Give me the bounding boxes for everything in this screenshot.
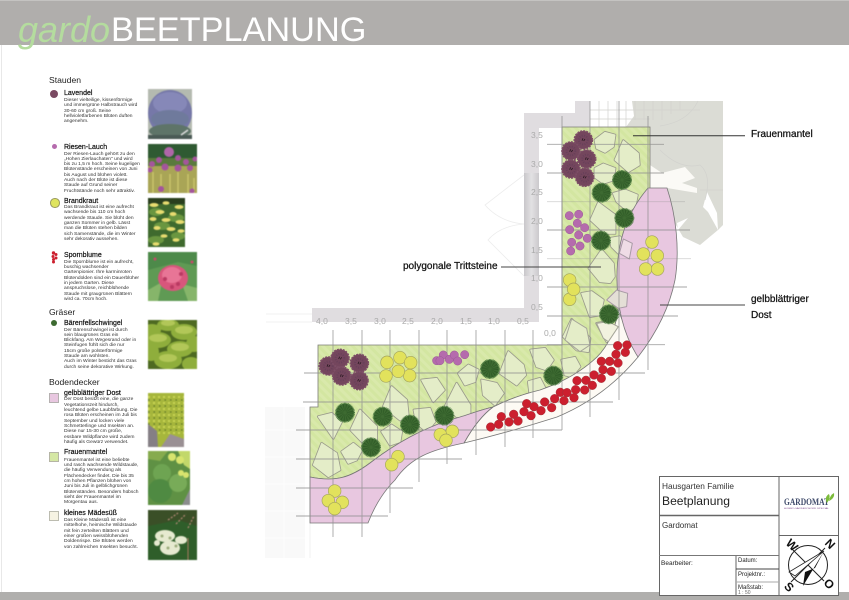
text: Spornblume: Blütendolden sind ein Dauerblüher [64, 276, 139, 281]
logo: Gardomat: GARDOMAT [784, 497, 829, 507]
logo: Gardomat [784, 493, 834, 510]
text: kleines Mädesüß: von zahlreichen Insekten besucht. [64, 545, 138, 550]
text: Spornblume: in jedem Garten. Diese [64, 281, 114, 286]
scale labels: 0,5 [517, 316, 529, 326]
label: Frauenmantel: Frauenmantel [64, 449, 107, 456]
text: gelbblättriger Dost [64, 396, 138, 445]
text: Riesen-Lauch: „Hohen Zierlauchaten" und wird [64, 157, 133, 162]
text: Bärenfellschwingel: durch seine dekorative Wirkung. [64, 365, 134, 370]
wall: concrete L edging [312, 101, 590, 322]
leader: polygonale Trittsteine [501, 266, 601, 268]
footer band [0, 592, 849, 600]
background: top-right terrain [590, 101, 723, 245]
text: Frauenmantel: Blütenständen. Besonders hübsch [64, 490, 138, 495]
text: Bärenfellschwingel [64, 328, 137, 370]
text: Lavendel: Dieser vielteilige, kissenförmige [64, 98, 132, 103]
icon: Riesen-Lauch [52, 144, 56, 148]
Brandkraut group [322, 351, 459, 515]
text: Spornblume: wird ca. 70cm hoch. [64, 297, 108, 302]
heading: Bodendecker: Bodendecker [49, 377, 100, 387]
stepping stones overlapping the white bed [565, 319, 618, 352]
text: Bärenfellschwingel: sein blaugrünes Gras ein [64, 333, 118, 338]
text: Frauenmantel: Morgentau aus. [64, 500, 98, 505]
Bärenfellschwingel group [592, 171, 634, 324]
callout: polygonale Trittsteine: polygonale Trittsteine [403, 261, 498, 272]
icon: gelbblättriger Dost [49, 393, 59, 403]
scale labels [316, 130, 556, 338]
text: Lavendel: hellvioletfarbenen Blüten duften [64, 114, 133, 119]
text: Lavendel [64, 98, 137, 124]
text: Riesen-Lauch: Auch nach der Blüte ist diese [64, 178, 127, 183]
callout: gelbblättriger Dost: gelbblättriger [751, 294, 809, 305]
text: kleines Mädesüß [64, 518, 138, 550]
text: Frauenmantel: cm hohen Pflanzen blühen von [64, 479, 131, 484]
text: Spornblume: anspruchslose, reichblühende [64, 286, 129, 291]
text: Lavendel: 30-60 cm groß. Seine [64, 109, 111, 114]
text: Brandkraut: sich Samenstände, die im Winter [64, 232, 136, 237]
text: Bärenfellschwingel: Auch im Winter besticht das Gras [64, 359, 137, 364]
icon: Frauenmantel [49, 452, 59, 462]
text: kleines Mädesüß: mittelhohe, heimische Wildstaude [64, 523, 137, 528]
scale labels: 1,0 [531, 273, 543, 283]
text: Frauenmantel: und rasch wachsende Wildstaude, [64, 463, 138, 468]
text: Riesen-Lauch: Blütenstände erscheinen von Juni [64, 167, 137, 172]
Brandkraut group [563, 236, 664, 306]
plants: vertical strip [562, 131, 664, 324]
text: Spornblume: Staude mit graugrünen Blättern [64, 292, 132, 297]
header band [0, 0, 849, 45]
field: Projektnr: Projektnr.: [738, 572, 765, 578]
text: Lavendel: angenehm. [64, 119, 88, 124]
heading: Gräser: Gräser [49, 307, 75, 317]
plants: horizontal strip [319, 349, 499, 515]
text: gelbblättriger Dost: rosa Blüten erscheinen im Juli bis [64, 413, 137, 418]
label: Spornblume: Spornblume [64, 252, 102, 259]
Riesen-Lauch group [565, 210, 591, 255]
icon: Spornblume [52, 251, 58, 264]
label: Lavendel: Lavendel [64, 90, 92, 97]
callout: gelbblättriger Dost: Dost [751, 310, 772, 321]
leader: Frauenmantel [633, 135, 745, 137]
bed: kleines Mädesüß white area [464, 310, 638, 443]
photo: kleines Mädesüß [147, 509, 198, 561]
field: Datum: Datum: [738, 558, 757, 564]
stepping stones [313, 132, 639, 477]
bed: lower-left Dost pink area [310, 407, 493, 523]
icon: Bärenfellschwingel [51, 320, 57, 326]
plants: Spornblume group [486, 341, 631, 431]
text: Riesen-Lauch [64, 152, 140, 194]
text: Spornblume: buschig wachsender [64, 265, 109, 270]
text: Brandkraut: man die Blüten stehen bilden [64, 226, 127, 231]
text: Lavendel: und immergrüne Halbstrauch wird [64, 103, 137, 108]
text: Riesen-Lauch: Fruchtstände noch sehr attraktiv. [64, 189, 135, 194]
title block dividers and compass [659, 477, 838, 595]
scale labels: 0,0 [544, 328, 556, 338]
scale labels: 1,5 [460, 316, 472, 326]
background: building outline lines [485, 175, 524, 276]
text: Brandkraut: wachsende bis 110 cm hoch [64, 210, 125, 215]
text: Bärenfellschwingel: Steinfugen fühlt sich die nur [64, 343, 124, 348]
logo: Gardomat: HOBBY-GARDEN WORK SPECIAL [784, 507, 830, 510]
text: Riesen-Lauch: Der Riesen-Lauch gehört zu den [64, 152, 135, 156]
measuring grid [296, 101, 691, 537]
text: Brandkraut: ganzen Sommer in gelb. Lässt [64, 221, 130, 226]
icon: compass: N [822, 536, 838, 552]
title block [659, 476, 839, 596]
Lavendel group [319, 349, 368, 390]
text: Brandkraut [64, 204, 136, 242]
scale labels: 2,5 [531, 187, 543, 197]
text: gelbblättriger Dost: häufig als Gewürz verwendet. [64, 440, 128, 445]
text: Bärenfellschwingel: 15cm große polsterförmige [64, 349, 122, 354]
text: Frauenmantel [64, 458, 138, 505]
photo: Spornblume [147, 251, 198, 302]
text: Riesen-Lauch: bis zu 1,5 m hoch. Seine kugeligen [64, 162, 140, 167]
bed: Frauenmantel green area [310, 127, 650, 479]
photo: Brandkraut [147, 197, 186, 248]
text: Spornblume: Die Spornblume ist ein aufrecht, [64, 260, 134, 265]
left page edge [1, 45, 2, 592]
scale value: 1 : 50 [738, 590, 751, 596]
Lavendel group [562, 131, 596, 186]
text: Spornblume [64, 260, 139, 302]
text: kleines Mädesüß: mit fein zerteilten Blättern und [64, 529, 129, 534]
text: Brandkraut: sehr dekorativ aussehen. [64, 237, 119, 242]
text: gelbblättriger Dost: Schmetterlinge und Insekten an. [64, 424, 134, 429]
icon: Lavendel [50, 90, 58, 98]
scale labels: 1,5 [531, 245, 543, 255]
text: kleines Mädesüß: einer großen weissblühenden [64, 534, 128, 539]
background: lower left paving [265, 314, 312, 558]
text: Bärenfellschwingel: Blickfang. Am Wegesrand oder in [64, 338, 136, 343]
text: gelbblättriger Dost: Vegetationszeit hindurch, [64, 403, 119, 408]
label: Riesen-Lauch: Riesen-Lauch [64, 144, 107, 151]
text: Bärenfellschwingel: Staude am wohlsten. [64, 354, 110, 359]
text: kleines Mädesüß: Doldenrispe. Die Blüten werden [64, 539, 133, 544]
scale labels: 2,0 [431, 316, 443, 326]
label: Bärenfellschwingel: Bärenfellschwingel [64, 320, 122, 327]
text: gelbblättriger Dost: Diese nur 15-30 cm große, [64, 429, 122, 434]
scale labels: 4,0 [316, 316, 328, 326]
client name: Hausgarten Familie [662, 481, 734, 491]
text: Frauenmantel: Juni bis Juli in gelblichgrünen [64, 484, 128, 489]
scale labels: 2,5 [402, 316, 414, 326]
scale labels: 3,5 [345, 316, 357, 326]
text: gelbblättriger Dost: leuchtend gelbe Laubfärbung. Die [64, 408, 137, 413]
scale labels: 1,0 [488, 316, 500, 326]
scale labels: 2,0 [531, 216, 543, 226]
text: Frauenmantel: sieht der Frauenmantel im [64, 495, 121, 500]
text: Riesen-Lauch: Staude auf Grund seiner [64, 183, 117, 188]
field: Bearbeiter: Bearbeiter: [661, 560, 693, 567]
heading: Stauden: Stauden [49, 75, 81, 85]
text: gelbblättriger Dost: September und locken viele [64, 419, 124, 424]
text: gelbblättriger Dost: essbare Wildpflanze wird zudem [64, 435, 134, 440]
drawing title: Beetplanung [662, 494, 730, 508]
icon: kleines Mädesüß [49, 511, 59, 521]
label: gelbblättriger Dost: gelbblättriger Dost [64, 390, 121, 397]
photo: Lavendel [147, 88, 193, 140]
text: Brandkraut: werdende Staude. Sie blüht den [64, 216, 134, 221]
text: kleines Mädesüß: Das Kleine Mädesüß ist eine [64, 518, 126, 523]
text: Bärenfellschwingel: Der Bärenschwingel ist durch [64, 328, 128, 332]
text: gelbblättriger Dost: Der Dost besitzt eine, die ganze [64, 397, 133, 402]
field: Maßstab: Maßstab: [738, 585, 763, 591]
text: Frauenmantel: die häufig Verwendung als [64, 468, 121, 473]
author company: Gardomat [662, 521, 698, 530]
scale labels: 3,0 [531, 159, 543, 169]
text: Frauenmantel: Frauenmantel ist eine beliebte [64, 458, 130, 463]
callout: gelbblättriger Dost [751, 294, 809, 321]
bed: upper-right Dost pink lens [617, 188, 677, 357]
icon: compass: S [781, 579, 797, 595]
photo: Frauenmantel [147, 450, 191, 506]
text: Brandkraut: Das Brandkraut ist eine aufrecht [64, 205, 134, 210]
Bärenfellschwingel group [336, 360, 499, 457]
text: Frauenmantel: Flächendecker findet. Die bis 35 [64, 474, 134, 479]
icon: compass [781, 536, 838, 595]
icon: compass: O [821, 576, 837, 592]
icon: compass: W [783, 536, 801, 554]
photo: Bärenfellschwingel [147, 319, 198, 370]
scale labels: 3,5 [531, 130, 543, 140]
stepping stones overlapping the lens [607, 239, 632, 308]
photo: gelbblättriger Dost [147, 392, 185, 448]
photo: Riesen-Lauch [147, 143, 198, 194]
label: kleines Mädesüß: kleines Mädesüß [64, 510, 117, 517]
icon: Brandkraut [50, 198, 60, 208]
label: Brandkraut: Brandkraut [64, 198, 98, 205]
leader: gelbblättriger Dost [660, 304, 745, 306]
scale labels: 3,0 [374, 316, 386, 326]
callout: Frauenmantel: Frauenmantel [751, 129, 813, 140]
text: Spornblume: Gartenpionier. Ihre karminroten [64, 270, 132, 275]
scale labels: 0,5 [531, 302, 543, 312]
title: BEETPLANUNG: BEETPLANUNG [111, 11, 366, 49]
text: Riesen-Lauch: bis August und blühen violett. [64, 173, 128, 178]
Riesen-Lauch group [432, 350, 469, 365]
title: gardo: gardo [18, 9, 110, 50]
